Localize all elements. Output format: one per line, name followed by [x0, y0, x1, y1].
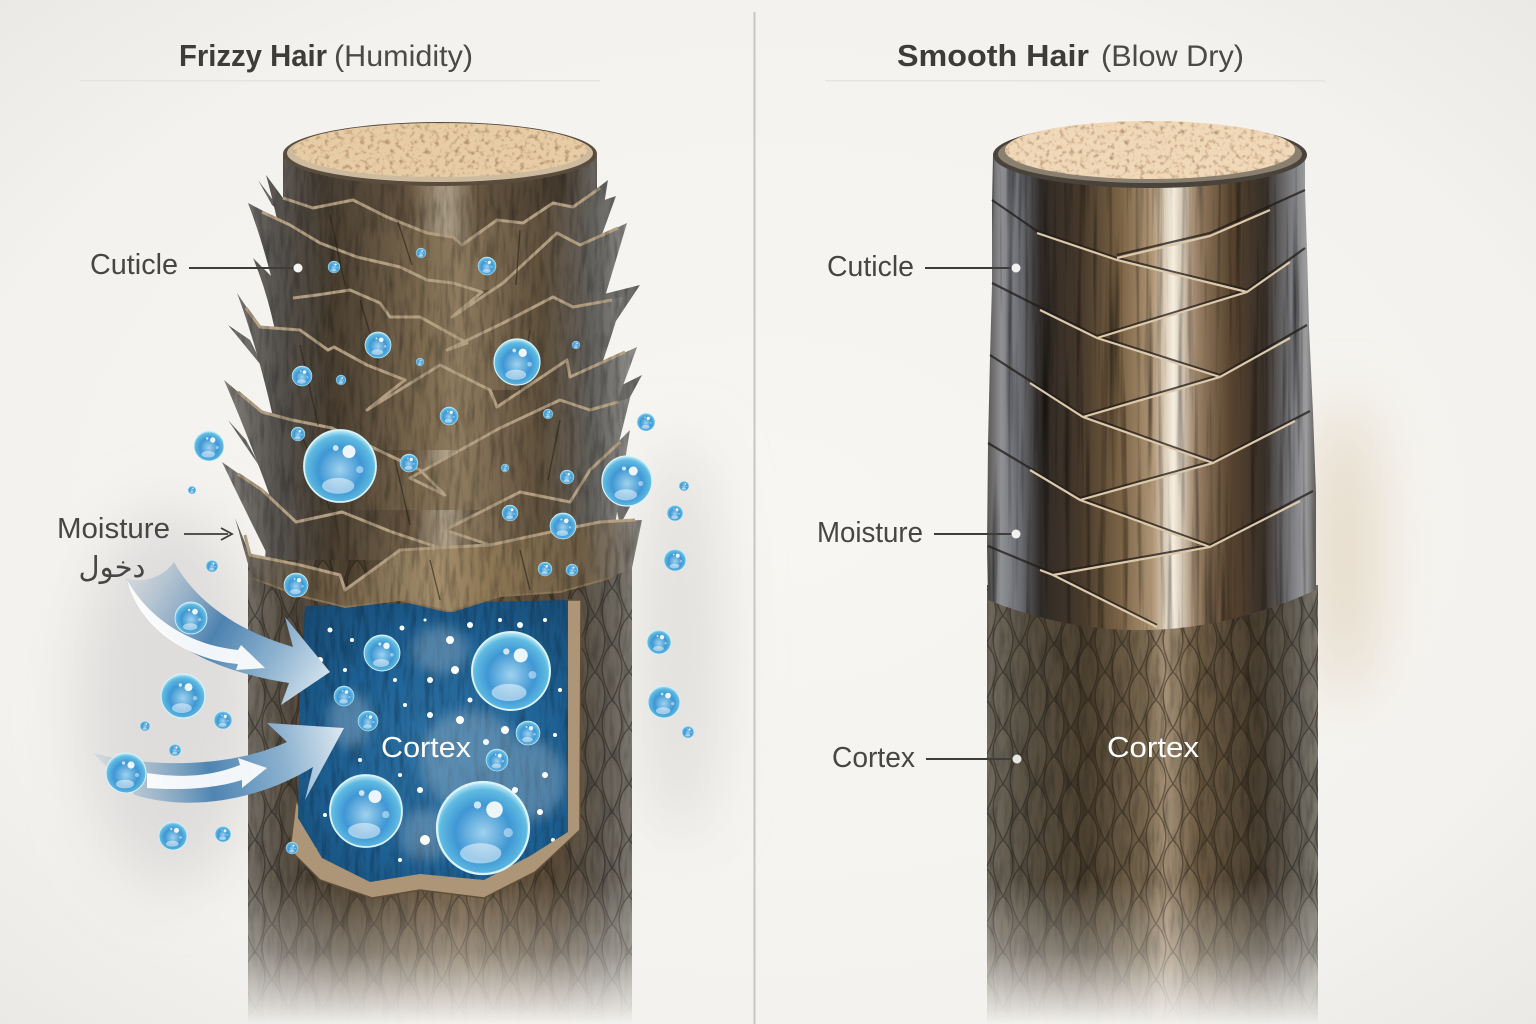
- label: moisture: [817, 517, 1020, 549]
- hair top cross-section: [283, 122, 597, 186]
- hair column: cortex shaft: [987, 585, 1318, 1024]
- label: moisture with arrow: Moisture: [57, 513, 170, 545]
- cuticle row 1: [266, 175, 608, 290]
- hair barrel and backing: [265, 155, 615, 560]
- cuticle row 6: [222, 430, 630, 560]
- label: cortex on shaft: Cortex: [1107, 732, 1200, 764]
- label: cuticle: Cuticle: [827, 251, 914, 283]
- exposed cortex: [298, 600, 568, 882]
- white speckles: [312, 618, 562, 862]
- cuticle row 2: [248, 203, 627, 340]
- label: cuticle: Cuticle: [90, 249, 178, 281]
- title: frizzy hair: (Humidity): [334, 40, 473, 73]
- title: smooth hair: Smooth Hair: [897, 38, 1089, 73]
- frizzy cuticle scales: [222, 155, 650, 612]
- label: cuticle: [90, 249, 302, 281]
- arrow: moisture lower: [93, 723, 344, 803]
- label: moisture with arrow: [57, 513, 232, 584]
- cuticle row 3: [253, 258, 623, 390]
- soft shadows: [80, 400, 1373, 890]
- panel: frizzy hair: [57, 38, 694, 1024]
- label: cuticle: [827, 251, 1020, 283]
- label: moisture: Moisture: [817, 517, 923, 549]
- label: cortex: Cortex: [381, 732, 472, 764]
- cuticle row 7: lowest band: [235, 518, 642, 612]
- back spikes: [228, 180, 650, 525]
- panel: smooth hair: [817, 38, 1325, 1024]
- label: cortex pointer: [832, 742, 1022, 774]
- title: frizzy hair: Frizzy Hair: [179, 38, 327, 73]
- title: smooth hair: (Blow Dry): [1101, 40, 1244, 73]
- band seam highlights: [1030, 210, 1300, 627]
- title: smooth hair: [897, 38, 1244, 73]
- label: cortex pointer: Cortex: [832, 742, 915, 774]
- hair column: lower shaft: [248, 560, 632, 1024]
- label: moisture with arrow: دخول: [79, 550, 145, 584]
- hair top cross-section: [993, 121, 1307, 188]
- arrow: moisture upper: [125, 562, 330, 705]
- tan rim around open cortex: [290, 600, 581, 898]
- cuticle row 5: [224, 380, 630, 510]
- bark cracks: [300, 215, 560, 600]
- water droplets: [106, 248, 694, 874]
- title: frizzy hair: [179, 38, 473, 73]
- band seam shadows: [988, 190, 1313, 625]
- cuticle row 4: [237, 293, 637, 450]
- smooth cuticle bands: [985, 150, 1320, 640]
- center divider: [754, 12, 756, 1024]
